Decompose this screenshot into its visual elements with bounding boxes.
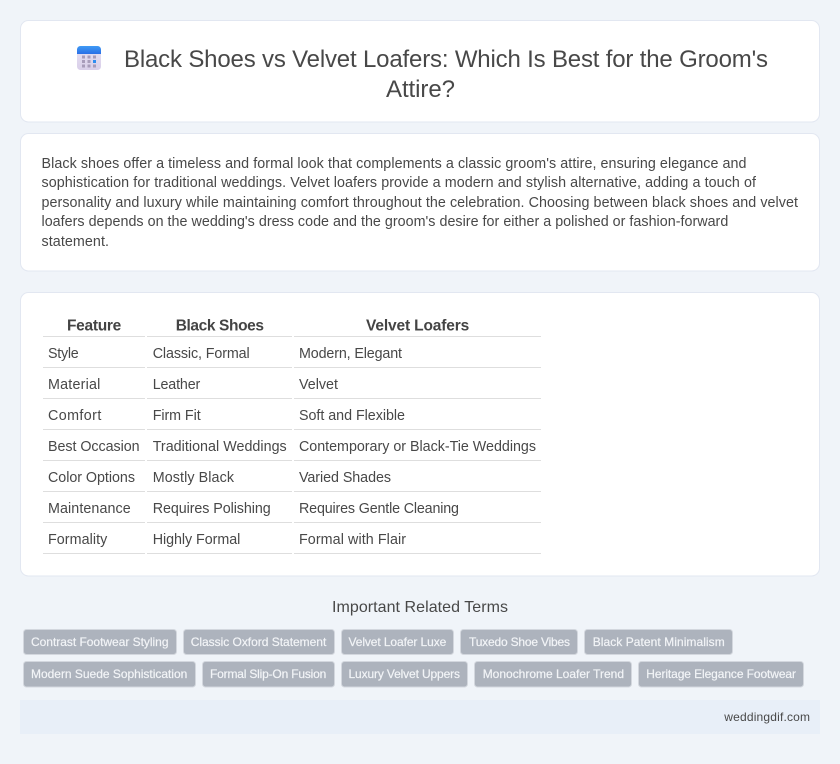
table row: comfort: Firm Fit [153,408,201,424]
footer [20,700,820,734]
table header: Velvet Loafers [366,318,469,334]
tag list: related terms [24,630,804,687]
text block: introduction paragraph: sophistication for traditional weddings. Velvet loafers provide a modern and stylish alternative, adding a touch of [42,175,756,191]
table row: comfort: Soft and Flexible [299,408,405,424]
table header: Black Shoes [176,318,264,334]
table row: style [48,346,402,362]
table row: material [48,377,338,393]
table row: best occasion: Contemporary or Black-Tie Weddings [299,439,536,455]
table row: color options: Mostly Black [153,470,235,486]
table row: best occasion: Best Occasion [48,439,140,455]
title: Attire? [386,76,455,103]
tag list: related terms: Heritage Elegance Footwear [646,667,796,681]
text block: introduction paragraph: loafers depends on the wedding's dress code and the groom's desire for either a polished or fashion-forward [42,214,728,230]
table row: maintenance: Requires Polishing [153,501,271,517]
table row: color options: Color Options [48,470,135,486]
table row: style: Classic, Formal [153,346,250,362]
table header [67,318,469,334]
tag list: related terms: Tuxedo Shoe Vibes [469,635,570,649]
table row: style: Modern, Elegant [299,346,402,362]
text block: introduction paragraph [42,156,798,250]
icon: calendar [77,46,101,70]
table row: formality: Formality [48,532,108,548]
text block: introduction paragraph: Black shoes offer a timeless and formal look that complements a classic groom's attire, ensuring elegance and [42,156,747,172]
panel: introduction [20,134,820,271]
table row: comfort: Comfort [48,408,101,424]
footer: weddingdif.com [723,710,810,724]
text block: introduction paragraph: statement. [42,234,109,250]
heading: important related terms: Important Related Terms [332,599,508,616]
table row: best occasion [48,439,536,455]
table row: maintenance: Maintenance [48,501,131,517]
table row: maintenance [48,501,459,517]
tag list: related terms: Modern Suede Sophistication [31,667,187,681]
title: Black Shoes vs Velvet Loafers: Which Is Best for the Groom's [124,46,768,73]
tag list: related terms: Formal Slip-On Fusion [210,667,326,681]
table row: formality [48,532,406,548]
table row: color options [48,470,391,486]
table row: formality: Formal with Flair [299,532,406,548]
title [124,46,768,103]
table row: material: Leather [153,377,201,393]
table row: color options: Varied Shades [299,470,391,486]
panel: title card [20,20,820,122]
table row: style: Style [48,346,79,362]
panel: comparison table [20,292,820,576]
table row: material: Material [48,377,100,393]
table row: comfort [48,408,405,424]
table row: formality: Highly Formal [153,532,240,548]
table row: maintenance: Requires Gentle Cleaning [299,501,459,517]
tag list: related terms: Contrast Footwear Styling [31,635,168,649]
tag list: related terms: Velvet Loafer Luxe [348,635,447,649]
table header: Feature [67,318,122,334]
tag list: related terms: Luxury Velvet Uppers [348,667,460,681]
tag list: related terms: Black Patent Minimalism [593,635,725,649]
tag list: related terms: Monochrome Loafer Trend [483,667,624,681]
table row: material: Velvet [299,377,338,393]
text block: introduction paragraph: personality and luxury while maintaining comfort throughout the celebration. Choosing between black shoes and velvet [42,195,798,211]
tag list: related terms: Classic Oxford Statement [191,635,327,649]
table row: best occasion: Traditional Weddings [153,439,287,455]
